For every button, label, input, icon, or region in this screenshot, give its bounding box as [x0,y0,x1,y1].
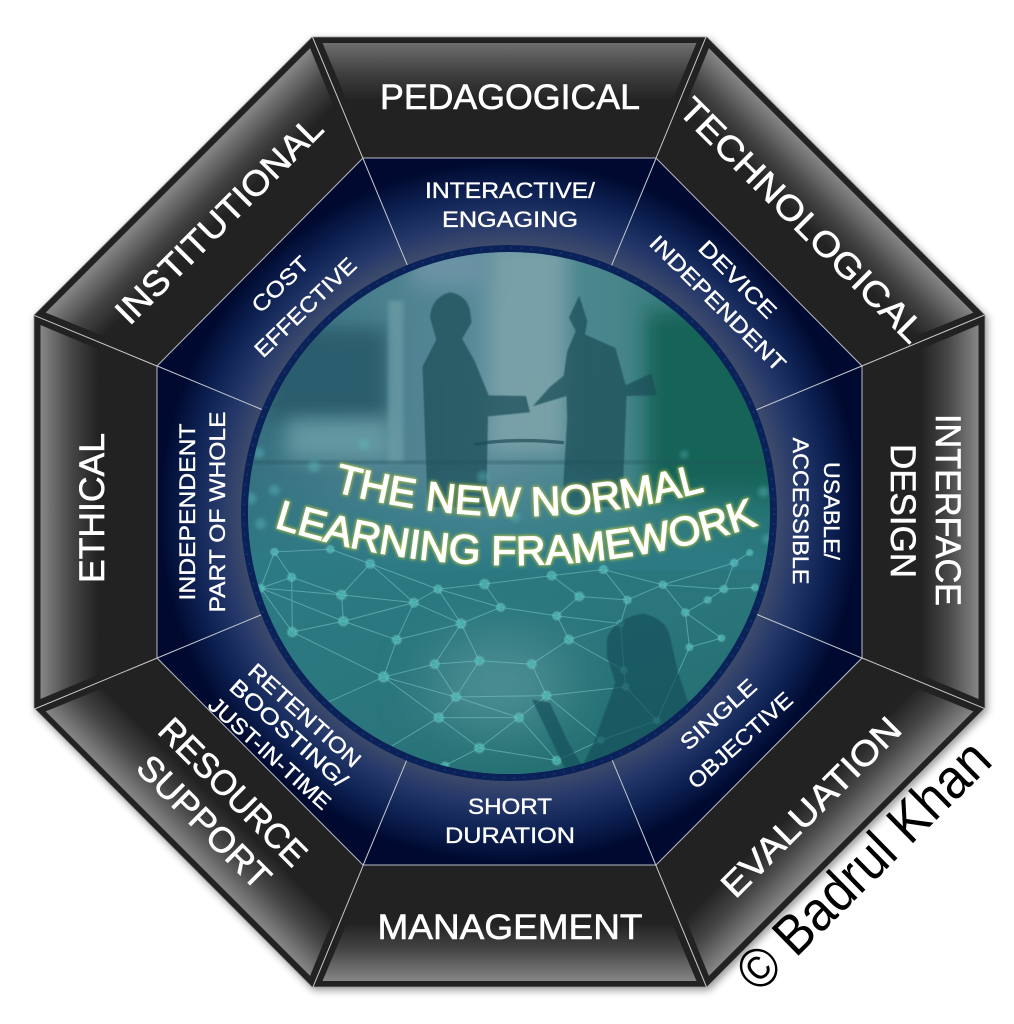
label: usable accessible [788,438,844,584]
label: retention boosting just-in-time: BOOSTING/ [225,674,354,794]
label: resource support: SUPPORT [129,747,279,897]
label: independent part of whole [175,412,230,612]
label: device independent: DEVICE [693,235,782,324]
network graphic [244,439,772,769]
label: short duration: DURATION [445,823,575,848]
segment: technological [620,37,978,394]
label: interface design [883,414,967,606]
label: interactive engaging [425,178,596,232]
silhouette of person at bottom [532,613,689,780]
label: single objective: OBJECTIVE [683,687,798,794]
label: cost effective: COST [246,251,314,318]
segment: ethical [34,325,156,709]
label: interface design: DESIGN [883,444,922,578]
label: usable accessible: ACCESSIBLE [788,438,813,584]
label: management: MANAGEMENT [378,908,642,947]
label: ethical: ETHICAL [73,433,112,583]
segment: interface design [863,315,984,699]
label: interface design: INTERFACE [928,414,967,606]
label: evaluation: EVALUATION [713,709,909,905]
segment: pedagogical [312,37,696,158]
photo background blocks [240,243,791,500]
label: short duration [445,794,575,848]
label: device independent: INDEPENDENT [644,230,791,377]
title: the new normal learning framework: LEARNING FRAMEWORK [276,498,759,566]
panel: inner blue octagon [156,158,863,866]
label: interactive engaging: INTERACTIVE/ [425,178,596,203]
label: retention boosting just-in-time: JUST-IN-TIME [203,692,336,815]
label: usable accessible: USABLE/ [819,462,844,561]
label: technological: TECHNOLOGICAL [671,90,932,351]
label: single objective: SINGLE [675,674,762,755]
segment: evaluation [627,623,985,980]
label: pedagogical: PEDAGOGICAL [380,78,640,117]
title: the new normal learning framework [274,461,762,568]
segment: management [322,866,706,987]
panel: central circular photo [240,243,791,785]
title: the new normal learning framework: LEARNING FRAMEWORK [274,495,762,568]
label: short duration: SHORT [468,794,552,819]
title: the new normal learning framework: THE NEW NORMAL [337,461,707,520]
label: interactive engaging: ENGAGING [442,207,578,232]
label: independent part of whole: INDEPENDENT [175,424,200,600]
label: retention boosting just-in-time [203,658,366,815]
title: the new normal learning framework: THE NEW NORMAL [340,463,704,517]
segment: institutional [34,44,392,401]
label: retention boosting just-in-time: RETENTION [243,658,366,773]
label: resource support: RESOURCE [151,710,315,874]
lighter haze behind network [430,640,570,730]
label: cost effective: EFFECTIVE [249,253,362,362]
label: independent part of whole: PART OF WHOLE [205,412,230,612]
label: institutional: INSTITUTIONAL [108,109,331,332]
segment: resource support [41,630,399,987]
silhouettes of people shaking hands [423,292,657,507]
